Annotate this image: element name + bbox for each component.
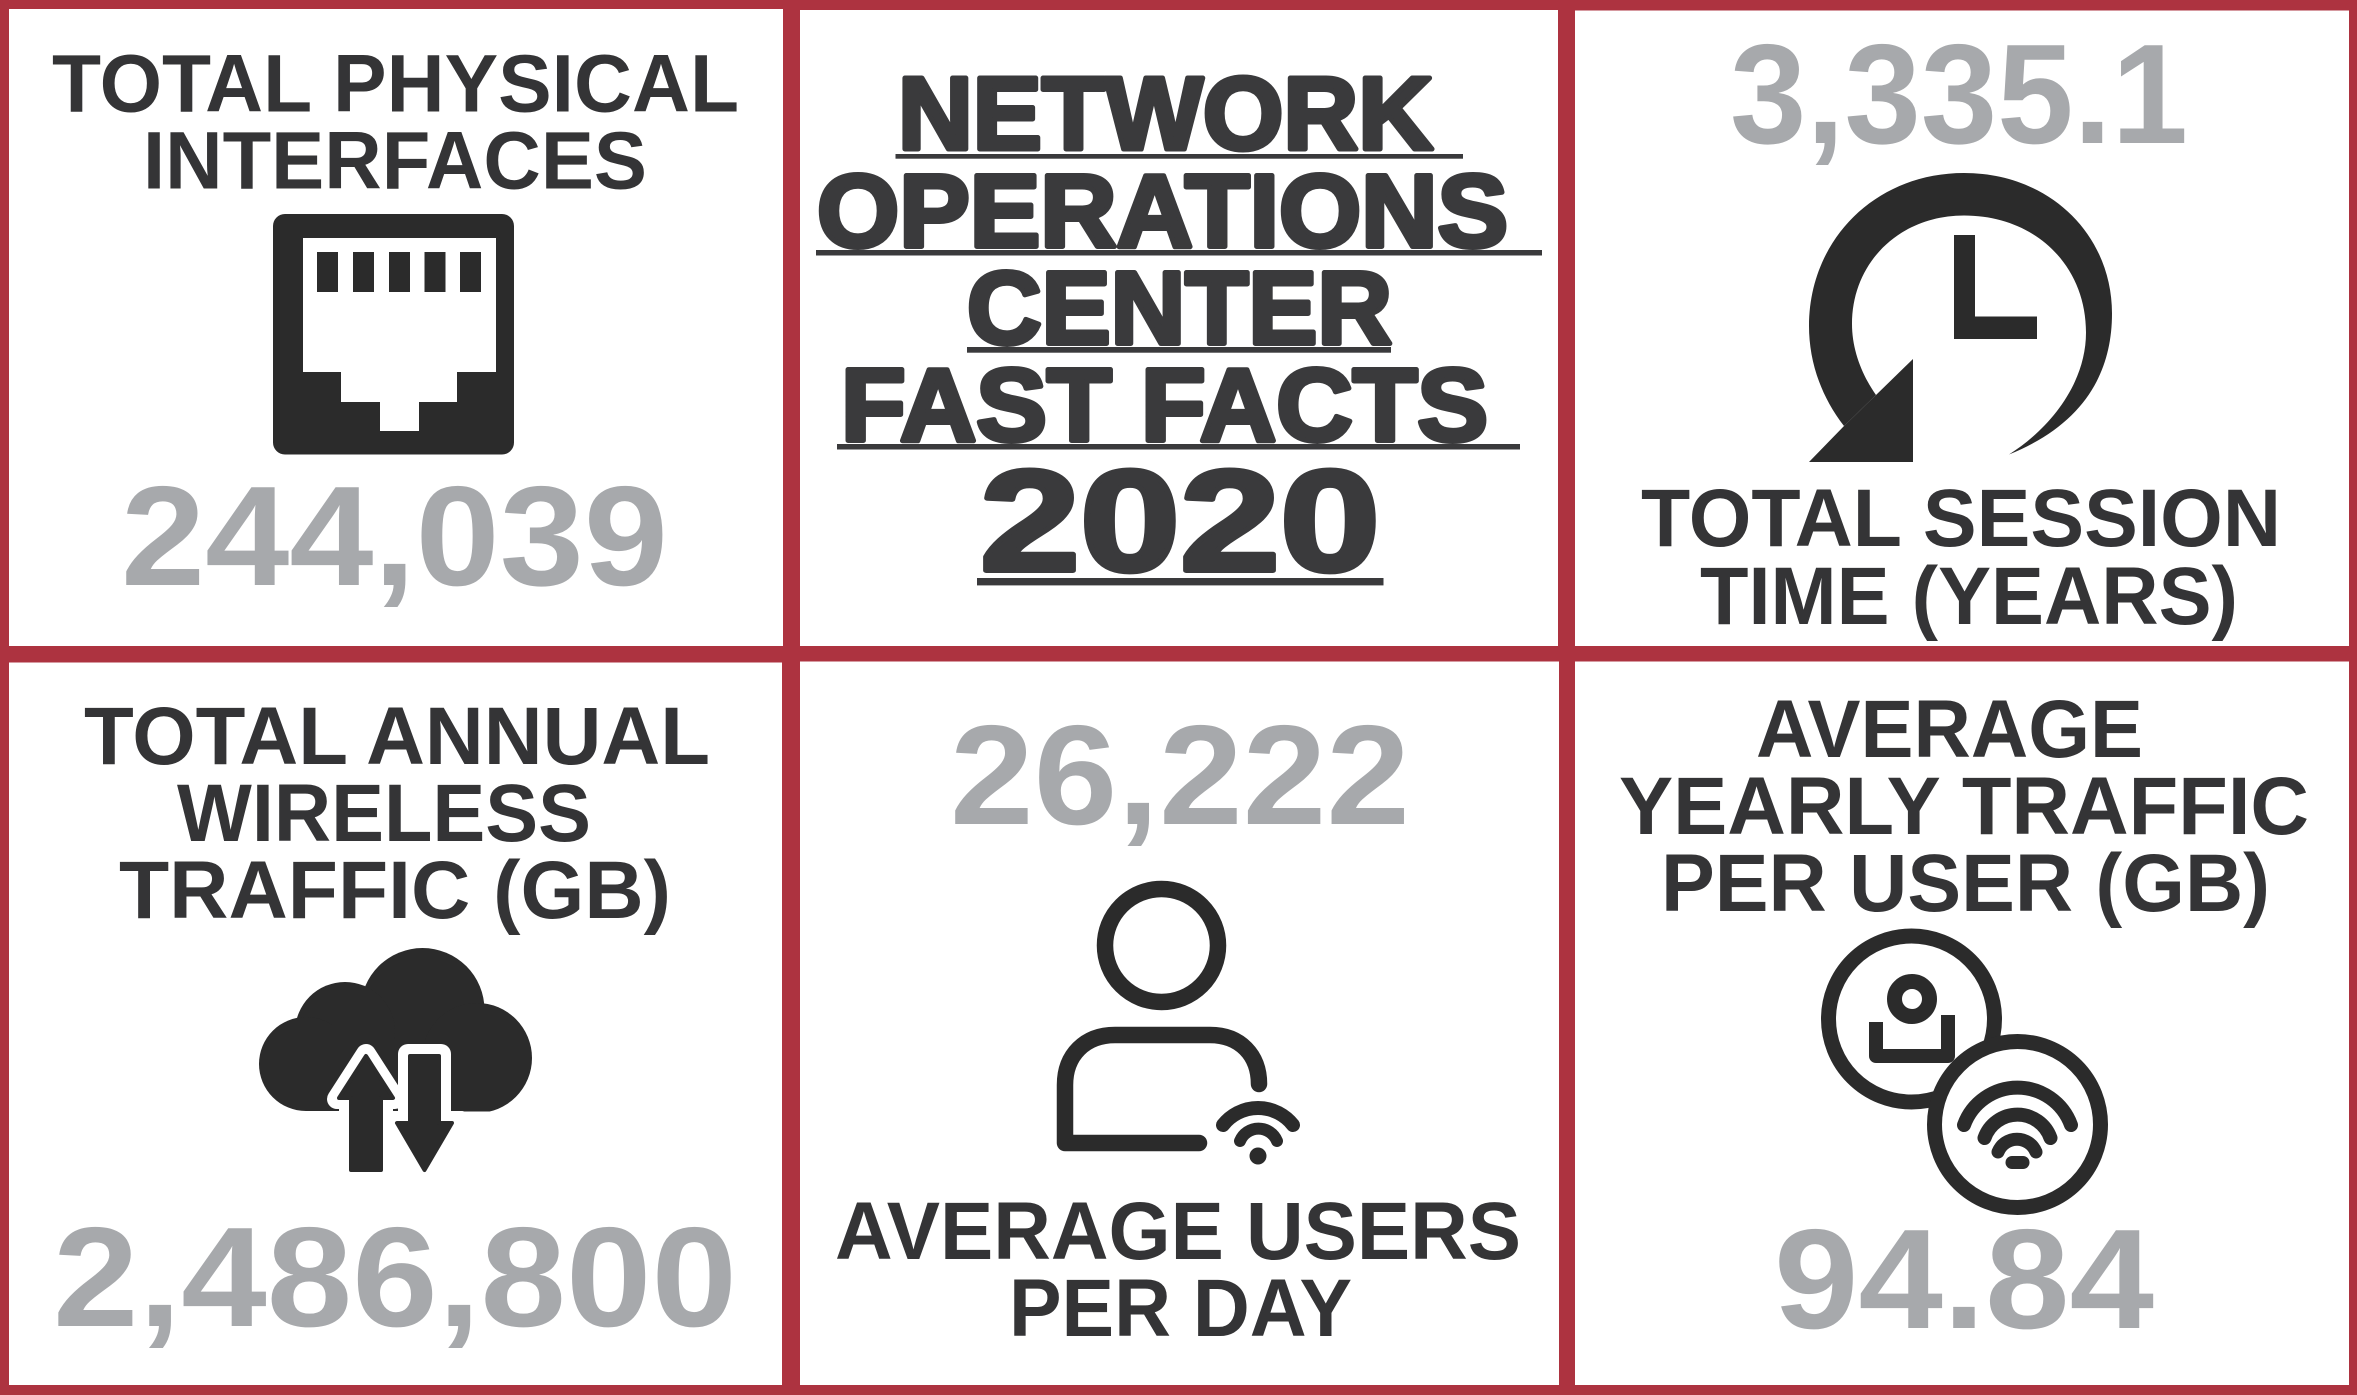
heading: total annual wireless traffic (gb) xyxy=(84,691,710,936)
heading: average yearly traffic per user (gb): AVERAGE xyxy=(1756,684,2143,775)
heading: average yearly traffic per user (gb): YEARLY TRAFFIC xyxy=(1619,761,2309,852)
panel: title xyxy=(800,10,1558,646)
title: network operations center fast facts 2020: NETWORK xyxy=(898,56,1433,171)
title: network operations center fast facts 2020: FAST FACTS xyxy=(841,348,1488,462)
panel: average users per day xyxy=(800,662,1559,1385)
panel: total annual wireless traffic xyxy=(9,662,782,1385)
title: network operations center fast facts 2020 xyxy=(816,56,1542,602)
heading: total session time (years): TOTAL SESSION xyxy=(1641,473,2281,564)
title: network operations center fast facts 2020: OPERATIONS xyxy=(817,154,1508,268)
icon: ethernet port xyxy=(273,214,514,454)
heading: total annual wireless traffic (gb): WIRELESS xyxy=(177,768,591,859)
heading: total physical interfaces: TOTAL PHYSICAL xyxy=(52,38,739,130)
heading: average users per day: AVERAGE USERS xyxy=(835,1186,1521,1277)
value: 2,486,800: 2,486,800 xyxy=(53,1198,737,1357)
value: 26,222: 26,222 xyxy=(950,696,1410,855)
heading: average yearly traffic per user (gb) xyxy=(1619,684,2309,929)
value: 244,039: 244,039 xyxy=(121,457,668,616)
icon: user and wifi circles xyxy=(1828,936,2100,1208)
heading: total session time (years): TIME (YEARS) xyxy=(1700,551,2238,642)
value: 94.84: 94.84 xyxy=(1774,1200,2154,1359)
icon: cloud with up and down arrows xyxy=(259,948,532,1182)
icon: user with wifi xyxy=(1065,889,1293,1164)
heading: total session time (years) xyxy=(1641,473,2281,642)
panel: average yearly traffic per user xyxy=(1575,662,2349,1385)
value: 3,335.1: 3,335.1 xyxy=(1730,15,2188,174)
heading: total physical interfaces: INTERFACES xyxy=(143,116,647,206)
heading: total annual wireless traffic (gb): TOTAL ANNUAL xyxy=(84,691,710,782)
icon: clock with circular arrow xyxy=(1809,173,2112,462)
heading: average users per day xyxy=(835,1186,1521,1354)
heading: total annual wireless traffic (gb): TRAFFIC (GB) xyxy=(119,845,671,936)
title: network operations center fast facts 2020: 2020 xyxy=(980,440,1380,602)
panel: total physical interfaces xyxy=(9,9,783,646)
heading: average yearly traffic per user (gb): PER USER (GB) xyxy=(1661,838,2270,929)
panel: total session time xyxy=(1575,10,2349,646)
heading: average users per day: PER DAY xyxy=(1009,1263,1352,1354)
title: network operations center fast facts 2020: CENTER xyxy=(967,250,1392,366)
heading: total physical interfaces xyxy=(52,38,739,206)
